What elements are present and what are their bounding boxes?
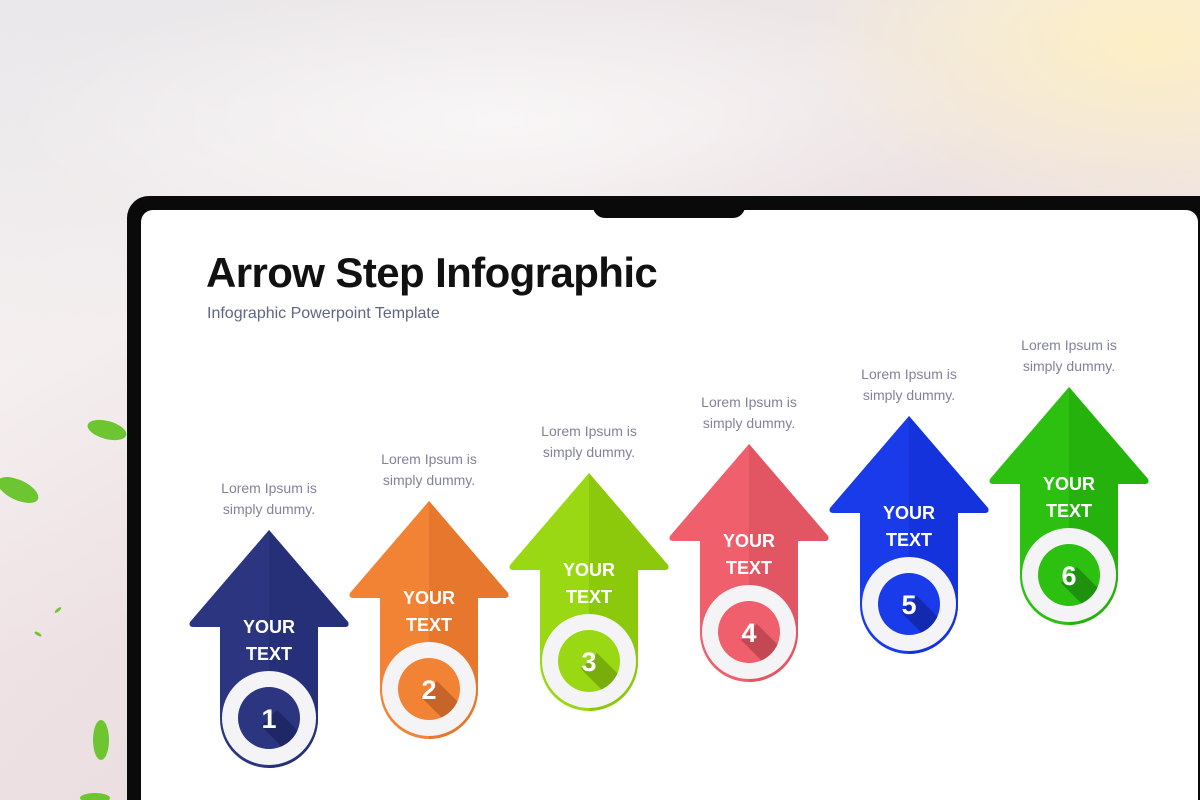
- arrow 5: Lorem Ipsum is: [861, 366, 957, 382]
- tablet frame: [127, 196, 1200, 800]
- arrow 1: TEXT: [246, 644, 292, 664]
- arrow 6: Lorem Ipsum is: [1021, 337, 1117, 353]
- arrows chart: [190, 340, 1148, 768]
- arrow 5: 5: [901, 590, 917, 620]
- arrow 5: simply dummy.: [863, 387, 955, 403]
- arrow 3: TEXT: [566, 587, 612, 607]
- arrow 4: 4: [741, 618, 757, 648]
- arrow 3: 3: [581, 647, 597, 677]
- arrow 1: YOUR: [243, 617, 295, 637]
- arrow 2: 2: [421, 675, 437, 705]
- arrow 6: simply dummy.: [1023, 358, 1115, 374]
- leaves: [0, 420, 126, 800]
- arrow 6: YOUR: [1043, 474, 1095, 494]
- arrow 3: [510, 423, 668, 711]
- notch: [593, 196, 745, 218]
- arrow 5: [830, 366, 988, 654]
- arrow 4: TEXT: [726, 558, 772, 578]
- arrow 4: Lorem Ipsum is: [701, 394, 797, 410]
- title: Arrow Step Infographic: [206, 249, 657, 296]
- screen: [141, 210, 1198, 800]
- arrow 2: simply dummy.: [383, 472, 475, 488]
- arrow 4: [670, 394, 828, 682]
- arrow 1: Lorem Ipsum is: [221, 480, 317, 496]
- arrow 2: Lorem Ipsum is: [381, 451, 477, 467]
- arrow 6: 6: [1061, 561, 1077, 591]
- arrow 1: [190, 480, 348, 768]
- arrow 5: TEXT: [886, 530, 932, 550]
- arrow 2: YOUR: [403, 588, 455, 608]
- arrow 4: simply dummy.: [703, 415, 795, 431]
- arrow 1: simply dummy.: [223, 501, 315, 517]
- arrow 1: 1: [261, 704, 277, 734]
- arrow 4: YOUR: [723, 531, 775, 551]
- arrow 2: [350, 451, 508, 739]
- arrow 6: [990, 337, 1148, 625]
- subtitle: Infographic Powerpoint Template: [207, 305, 440, 322]
- arrow 5: YOUR: [883, 503, 935, 523]
- arrow 6: TEXT: [1046, 501, 1092, 521]
- arrow 3: YOUR: [563, 560, 615, 580]
- arrow 2: TEXT: [406, 615, 452, 635]
- arrow 3: simply dummy.: [543, 444, 635, 460]
- arrow 3: Lorem Ipsum is: [541, 423, 637, 439]
